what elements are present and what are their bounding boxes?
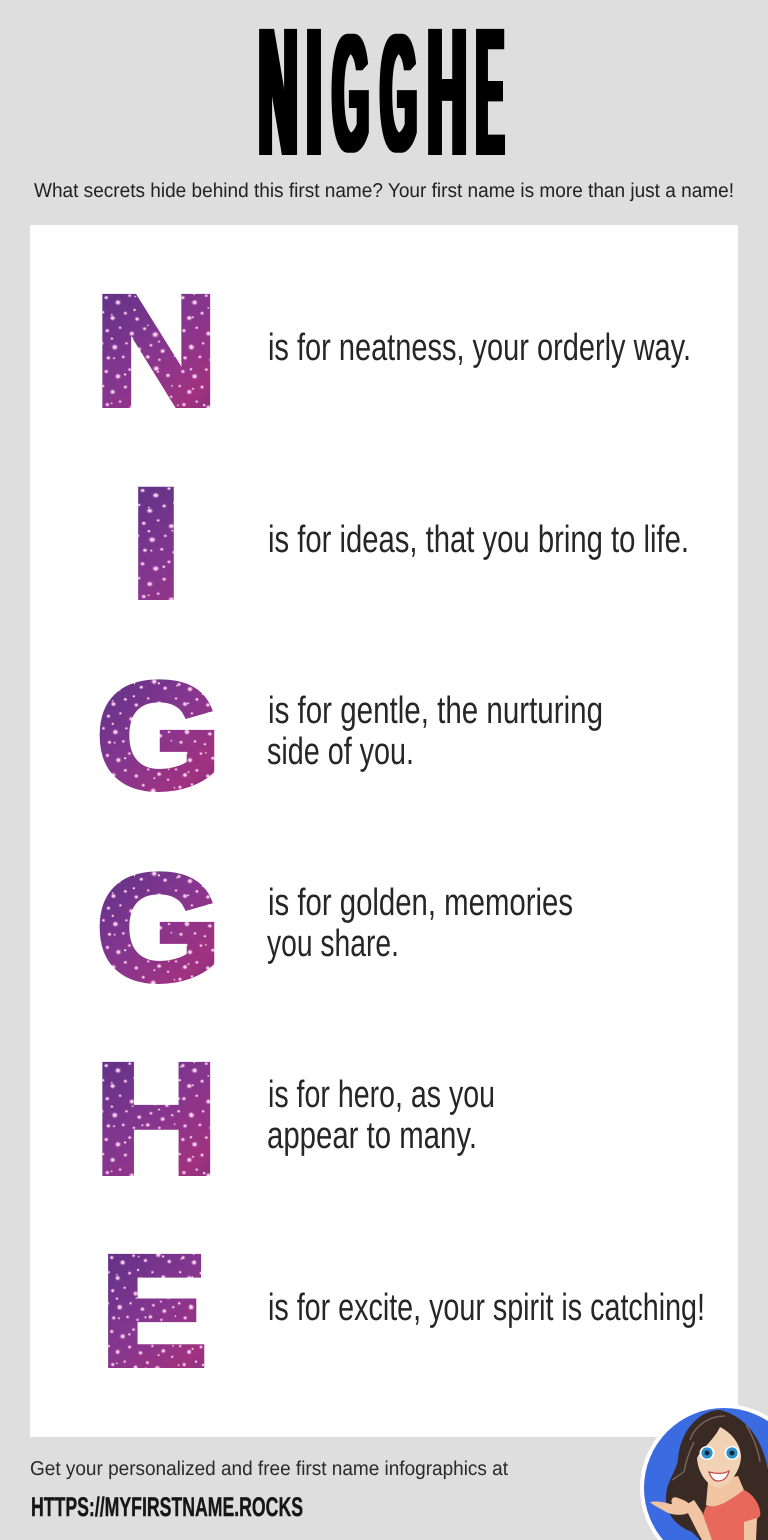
mouth bbox=[709, 1471, 729, 1481]
footer url: HTTPS://MYFIRSTNAME.ROCKS bbox=[31, 1492, 303, 1522]
title: G bbox=[381, 0, 417, 188]
text: H meaning second line: appear to many. bbox=[267, 1115, 477, 1157]
text: second G meaning second line: you share. bbox=[267, 923, 399, 965]
eyes bbox=[700, 1446, 714, 1460]
text: G meaning: is for gentle, the nurturing bbox=[268, 690, 603, 732]
galaxy letter E: E bbox=[101, 1224, 207, 1399]
text: H meaning: is for hero, as you bbox=[268, 1074, 495, 1116]
shirt bbox=[701, 1490, 760, 1540]
galaxy letter G: G bbox=[96, 652, 221, 821]
title: G bbox=[333, 0, 369, 188]
row: letter I bbox=[129, 457, 689, 631]
row: letter N bbox=[94, 264, 691, 439]
row: letter E bbox=[101, 1224, 705, 1399]
panel: letters bbox=[30, 225, 738, 1437]
row: letter G bbox=[96, 652, 603, 821]
text: G meaning second line: side of you. bbox=[267, 731, 414, 773]
galaxy letter N: N bbox=[94, 264, 218, 439]
row: letter H bbox=[94, 1032, 495, 1207]
icon: avatar woman in blue circle bbox=[640, 1404, 768, 1540]
galaxy letter G: G bbox=[96, 844, 221, 1013]
footer invitation text: Get your personalized and free first name infographics at bbox=[30, 1458, 508, 1480]
galaxy letter I: I bbox=[129, 457, 183, 631]
title bbox=[258, 0, 504, 195]
galaxy letter H: H bbox=[94, 1032, 218, 1207]
right arm bbox=[744, 1518, 757, 1540]
hair bbox=[666, 1410, 768, 1540]
row: second letter G bbox=[96, 844, 573, 1013]
subtitle: What secrets hide behind this first name? Your first name is more than just a name! bbox=[34, 180, 734, 202]
face bbox=[697, 1427, 741, 1488]
left arm bbox=[684, 1500, 712, 1540]
text: second G meaning: is for golden, memories bbox=[268, 882, 573, 924]
neck bbox=[706, 1476, 744, 1510]
hand bbox=[650, 1497, 692, 1515]
